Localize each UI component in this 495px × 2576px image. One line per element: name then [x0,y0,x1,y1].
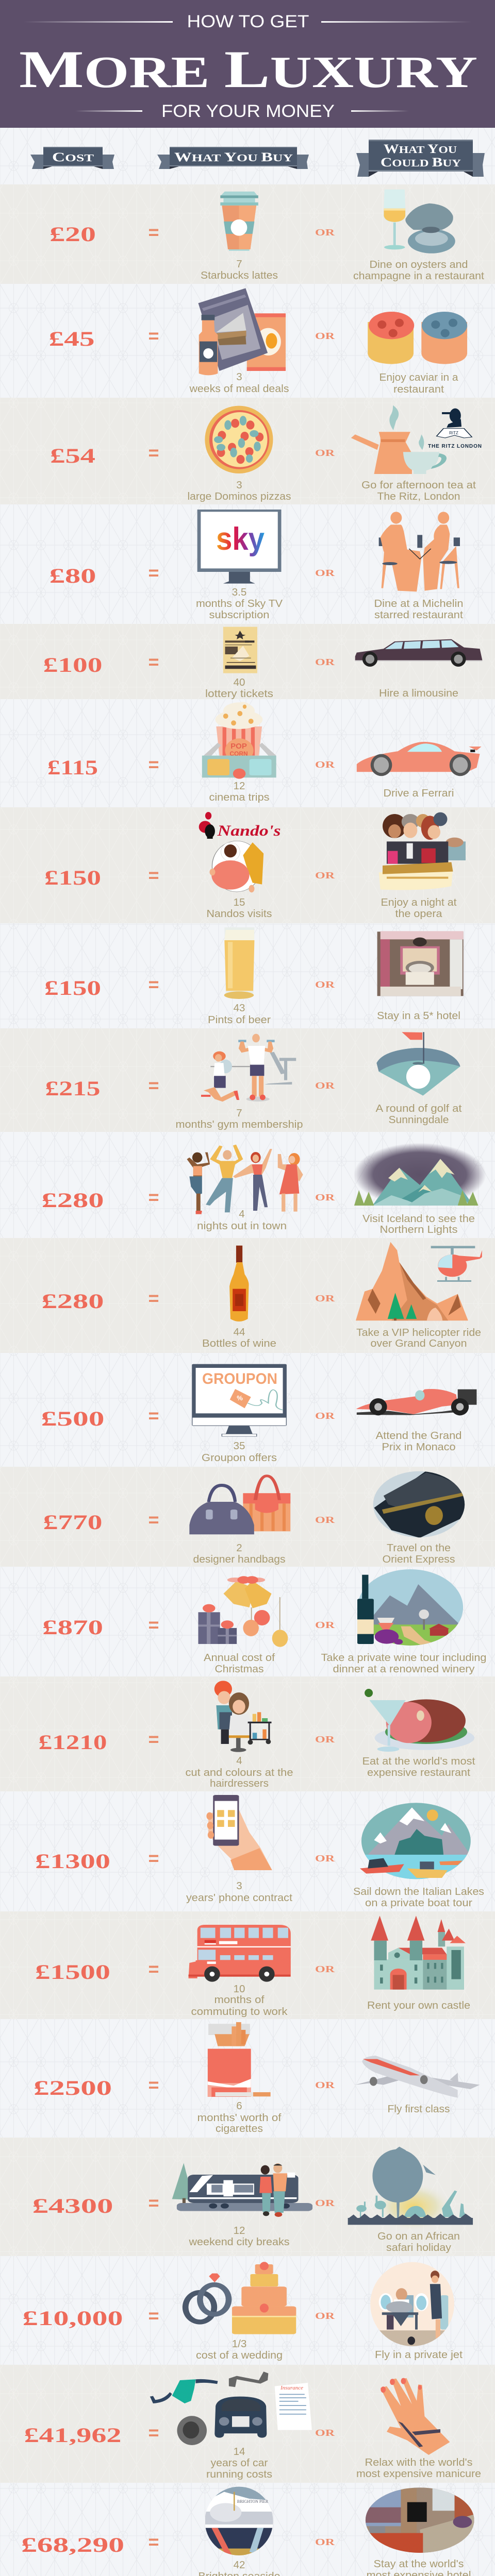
caption: wine: Bottles of wine [202,1337,276,1349]
cost: £150 [44,976,101,999]
equals sign: = [148,1848,159,1869]
icon: meal deal [198,288,286,375]
caption: caviar: Enjoy caviar in a [380,371,458,383]
caption: wedding [196,2338,283,2361]
equals sign: = [148,1187,159,1208]
caption: pizzas: 3 [236,479,242,491]
row: £1210 [0,1676,495,1791]
cost: £100 [43,653,102,676]
caption: commuting: commuting to work [191,2006,288,2018]
caption: city breaks: 12 [234,2225,245,2236]
or label: OR [315,2537,335,2547]
or label: OR [315,979,335,990]
row: £1500 [0,1911,495,2019]
caption: caviar: restaurant [393,383,444,395]
equals sign: = [148,1287,159,1309]
panel: column headings [0,128,495,184]
row: £150 nandos [0,807,495,923]
caption: helicopter: Take a VIP helicopter ride [356,1327,481,1338]
caption: phone: years' phone contract [186,1892,292,1904]
caption: lattes: 7 [236,258,242,270]
cost: £10,000 [23,2307,123,2330]
icon: winery [357,1568,464,1647]
caption: meal deals [189,371,289,395]
cost: £2500 [34,2076,112,2099]
or label: OR [315,657,335,667]
icon: lottery ticket [223,627,257,673]
caption: christmas [204,1652,275,1675]
caption: commuting: 10 [234,1983,245,1995]
icon: castle [371,1916,466,1990]
caption: nights out: 4 [239,1208,245,1220]
caption: nandos [206,896,272,920]
or label: OR [315,227,335,238]
caption: car costs: 14 [234,2446,245,2458]
caption: brighton: 42 [234,2559,245,2571]
row: £280 wine [0,1238,495,1353]
heading ribbon: cost [30,147,114,169]
or label: OR [315,759,335,770]
caption: hotel: Stay in a 5* hotel [377,1010,460,1022]
icon: iceland mountains [354,1143,486,1207]
caption: meal deals: weeks of meal deals [189,383,289,395]
caption: manicure: Relax with the world's [365,2456,472,2468]
equals sign: = [148,1958,159,1979]
caption: lottery: lottery tickets [205,688,273,700]
row: £20 [0,184,495,284]
title line: how to get: HOW TO GET [187,12,309,31]
caption: gym [175,1107,303,1130]
caption: wine [202,1326,276,1349]
icon: geneva hotel room [365,2487,475,2554]
icon: cigarettes [208,2022,271,2097]
cost: £280 [41,1290,104,1313]
caption: geneva hotel: Stay at the world's [373,2558,464,2570]
caption: cigarettes: months' worth of [197,2112,282,2124]
row: £54 [0,398,495,504]
cost: £280 [41,1189,104,1212]
caption: oysters: Dine on oysters and [369,259,468,270]
caption: lattes: Starbucks lattes [201,269,278,281]
caption: manicure: most expensive manicure [356,2468,481,2480]
equals sign: = [148,865,159,886]
caption: grand prix [375,1430,462,1453]
icon: opera audience [379,812,466,890]
cost: £45 [48,327,95,350]
cost: £1210 [38,1731,107,1754]
caption: handbags: designer handbags [193,1553,286,1565]
caption: limousine: Hire a limousine [379,687,458,699]
caption: groupon: Groupon offers [202,1452,277,1464]
or label: OR [315,1411,335,1421]
caption: car costs: running costs [206,2468,272,2480]
equals sign: = [148,325,159,346]
cost: £150 [44,866,101,889]
icon: airplane [355,2056,480,2098]
equals sign: = [148,2531,159,2552]
icon: limousine [355,639,482,667]
caption: commuting [191,1983,288,2018]
or label: OR [315,1853,335,1863]
caption: opera [381,896,457,920]
caption: pizzas: large Dominos pizzas [188,490,291,502]
heading ribbon: cost: C OST [52,150,94,164]
icon: groupon monitor [192,1364,287,1436]
caption: caviar [380,371,458,395]
cost: £215 [45,1077,100,1100]
caption: michelin: starred restaurant [374,609,463,621]
caption: wine tour [321,1652,487,1675]
or label: OR [315,568,335,578]
caption: groupon: 35 [234,1440,245,1452]
or label: OR [315,448,335,458]
icon: handbags [189,1475,290,1534]
caption: safari: safari holiday [386,2242,452,2253]
caption: hairdressers: 4 [236,1755,242,1767]
icon: sky tv [197,510,281,584]
icon: caviar pots [368,312,467,364]
cost: £4300 [32,2194,113,2217]
icon: train and couple [172,2163,312,2217]
icon: pint of beer [224,927,254,999]
equals sign: = [148,2074,159,2095]
cost: £1500 [35,1960,110,1984]
equals sign: = [148,754,159,775]
or label: OR [315,1734,335,1744]
row: £770 [0,1467,495,1567]
caption: city breaks [188,2225,290,2248]
icon: gym [201,1034,296,1101]
row: £4300 [0,2138,495,2256]
icon: wedding rings and cake [183,2262,296,2334]
caption: oysters: champagne in a restaurant [353,270,484,282]
icon: ham and martini [365,1689,474,1752]
caption: nights out [197,1208,287,1232]
caption: wine: 44 [234,1326,245,1338]
cost: £500 [41,1407,104,1430]
or label: OR [315,2198,335,2208]
caption: iceland: Northern Lights [380,1224,458,1235]
heading ribbon: what you buy: W HAT Y OU B UY [174,150,293,164]
equals sign: = [148,1728,159,1750]
caption: geneva hotel [366,2558,471,2576]
caption: nandos: Nandos visits [206,908,272,920]
caption: groupon [202,1440,277,1464]
caption: afternoon tea: The Ritz, London [377,490,460,502]
icon: ferrari [357,742,482,776]
caption: handbags [193,1542,286,1565]
caption: michelin [374,598,463,621]
row: £215 [0,1028,495,1132]
row: £10,000 [0,2256,495,2365]
caption: first class: Fly first class [388,2103,450,2115]
icon: african safari [348,2147,473,2231]
caption: cigarettes: cigarettes [216,2123,263,2134]
row: £150 beer [0,923,495,1028]
caption: cigarettes: 6 [236,2100,242,2112]
icon: golf [376,1032,460,1096]
or label: OR [315,2311,335,2321]
icon: popcorn and 3d glasses: CORN [229,750,248,757]
caption: christmas: Annual cost of [204,1652,275,1664]
caption: pizzas [188,479,291,502]
row: £2500 [0,2019,495,2138]
caption: wedding: cost of a wedding [196,2349,283,2361]
caption: iceland: Visit Iceland to see the [362,1213,475,1225]
equals sign: = [148,222,159,243]
caption: brighton [198,2559,280,2576]
caption: sky tv: 3.5 [232,586,246,598]
cost: £870 [42,1616,103,1639]
equals sign: = [148,2192,159,2213]
caption: sky tv: months of Sky TV [196,598,283,609]
row: £500 [0,1353,495,1467]
icon: sky tv: sky [216,521,265,557]
caption: golf: Sunningdale [389,1114,449,1126]
or label: OR [315,1620,335,1630]
caption: cigarettes [197,2100,282,2134]
icon: formula one car [356,1389,476,1415]
title: more luxury: M ORE LUXURY [19,40,477,99]
equals sign: = [148,651,159,672]
cost: £20 [50,223,96,246]
cost: £115 [47,756,98,779]
icon: couple dining [379,512,460,591]
caption: expensive restaurant: expensive restaurant [367,1767,470,1778]
icon: afternoon tea at the ritz: RITZ [449,431,458,435]
caption: castle: Rent your own castle [367,1999,470,2011]
caption: hairdressers: hairdressers [210,1777,269,1789]
caption: oysters [353,259,484,282]
equals sign: = [148,974,159,995]
caption: grand prix: Prix in Monaco [382,1441,456,1453]
row: £870 [0,1567,495,1676]
equals sign: = [148,1405,159,1426]
or label: OR [315,2428,335,2438]
caption: car costs: years of car [210,2457,268,2469]
equals sign: = [148,1509,159,1530]
equals sign: = [148,1614,159,1635]
icon: car running costs [150,2371,312,2445]
or label: OR [315,870,335,880]
heading ribbon: what you could buy: WHAT YOU [384,142,457,156]
caption: opera: Enjoy a night at [381,896,457,908]
or label: OR [315,1192,335,1202]
icon: brighton pier: BRIGHTON PIER [237,2499,269,2504]
icon: helicopter over canyon [356,1242,482,1320]
caption: hairdressers: cut and colours at the [186,1767,293,1778]
or label: OR [315,2080,335,2090]
caption: golf: A round of golf at [375,1103,462,1114]
caption: wedding: 1/3 [232,2338,246,2350]
caption: orient express: Travel on the [387,1542,451,1554]
row: £45 [0,284,495,398]
icon: manicured hand [381,2378,450,2455]
caption: afternoon tea [361,479,476,502]
caption: cinema [209,780,269,803]
caption: iceland [362,1213,475,1235]
caption: gym: months' gym membership [175,1118,303,1130]
or label: OR [315,1964,335,1974]
icon: popcorn and 3d glasses [202,702,276,779]
caption: michelin: Dine at a Michelin [374,598,463,609]
caption: wine tour: Take a private wine tour including [321,1652,487,1664]
icon: afternoon tea at the ritz: THE RITZ LONDON [428,444,482,449]
cost: £41,962 [24,2424,122,2447]
icon: private jet [369,2262,456,2347]
caption: nandos: 15 [234,896,245,908]
caption: gym: 7 [236,1107,242,1119]
caption: golf [375,1103,462,1126]
icon: phone in hand [206,1795,272,1870]
cost: £80 [50,564,96,587]
caption: lattes [201,258,278,281]
caption: orient express: Orient Express [383,1553,455,1565]
caption: private jet: Fly in a private jet [375,2349,463,2361]
caption: helicopter [356,1327,481,1349]
caption: safari: Go on an African [377,2230,460,2242]
icon: bottle of wine [229,1246,249,1321]
caption: beer: Pints of beer [208,1014,271,1026]
row: £41,962 [0,2365,495,2483]
caption: ferrari: Drive a Ferrari [384,787,454,799]
caption: nights out: nights out in town [197,1220,287,1232]
heading ribbon: what you buy [157,147,309,169]
caption: sky tv [196,586,283,621]
caption: wine tour: dinner at a renowned winery [333,1663,475,1675]
icon: nandos chicken meal: Nando's [217,822,280,839]
heading ribbon: what you could buy: COULD BUY [381,156,461,170]
icon: popcorn and 3d glasses: POP [230,742,247,751]
or label: OR [315,1293,335,1303]
panel: header [0,0,495,128]
equals sign: = [148,1075,159,1096]
icon: five star hotel room [377,931,464,996]
row: £1300 [0,1791,495,1911]
caption: italian lakes [353,1886,484,1909]
caption: cinema: cinema trips [209,791,269,803]
icon: christmas [198,1576,288,1647]
caption: phone: 3 [236,1880,242,1892]
icon: hairdresser [214,1681,271,1752]
row: £115 [0,699,495,807]
cost: £68,290 [21,2533,124,2556]
row: £80 [0,504,495,624]
icon: italian lakes [360,1802,473,1880]
icon: afternoon tea at the ritz [351,405,482,474]
icon: groupon monitor: % [237,1394,243,1402]
icon: orient express train [372,1471,466,1538]
caption: expensive restaurant: Eat at the world's most [362,1755,475,1767]
caption: handbags: 2 [236,1542,242,1554]
caption: opera: the opera [395,908,442,920]
icon: pizza [205,406,273,473]
equals sign: = [148,562,159,583]
title line: for your money: FOR YOUR MONEY [161,101,335,121]
caption: beer: 43 [234,1002,245,1014]
caption: expensive restaurant [362,1755,475,1778]
equals sign: = [148,442,159,463]
caption: afternoon tea: Go for afternoon tea at [361,479,476,491]
cost: £54 [50,444,95,467]
cost: £770 [43,1511,102,1534]
caption: manicure [356,2456,481,2480]
icon: car running costs: Insurance [280,2385,303,2391]
or label: OR [315,1080,335,1091]
icon: coffee cup [220,192,258,251]
caption: safari [377,2230,460,2253]
caption: beer [208,1002,271,1026]
or label: OR [315,1515,335,1525]
icon: nandos chicken meal [199,812,280,892]
caption: orient express [383,1542,455,1565]
caption: lottery [205,676,273,700]
row: £68,290 [0,2483,495,2576]
icon: brighton pier [204,2486,275,2556]
caption: commuting: months of [214,1994,265,2006]
caption: hairdressers [186,1755,293,1789]
caption: cinema: 12 [234,780,245,792]
icon: dancers [187,1145,303,1214]
caption: christmas: Christmas [214,1663,264,1675]
caption: lottery: 40 [234,676,245,688]
heading ribbon: what you could buy [356,140,485,177]
caption: car costs [206,2446,272,2480]
equals sign: = [148,2305,159,2326]
icon: groupon monitor: GROUPON [202,1370,277,1387]
caption: italian lakes: Sail down the Italian Lakes [353,1886,484,1897]
icon: london bus [188,1925,291,1982]
equals sign: = [148,2422,159,2443]
caption: grand prix: Attend the Grand [375,1430,462,1442]
caption: phone [186,1880,292,1904]
caption: sky tv: subscription [209,609,269,621]
caption: italian lakes: on a private boat tour [365,1897,472,1909]
caption: helicopter: over Grand Canyon [370,1337,467,1349]
caption: city breaks: weekend city breaks [188,2236,290,2248]
row: £100 [0,624,495,700]
or label: OR [315,331,335,341]
icon: champagne and oysters [384,190,455,253]
row: £280 nights out [0,1132,495,1238]
caption: meal deals: 3 [236,371,242,383]
cost: £1300 [35,1850,110,1873]
